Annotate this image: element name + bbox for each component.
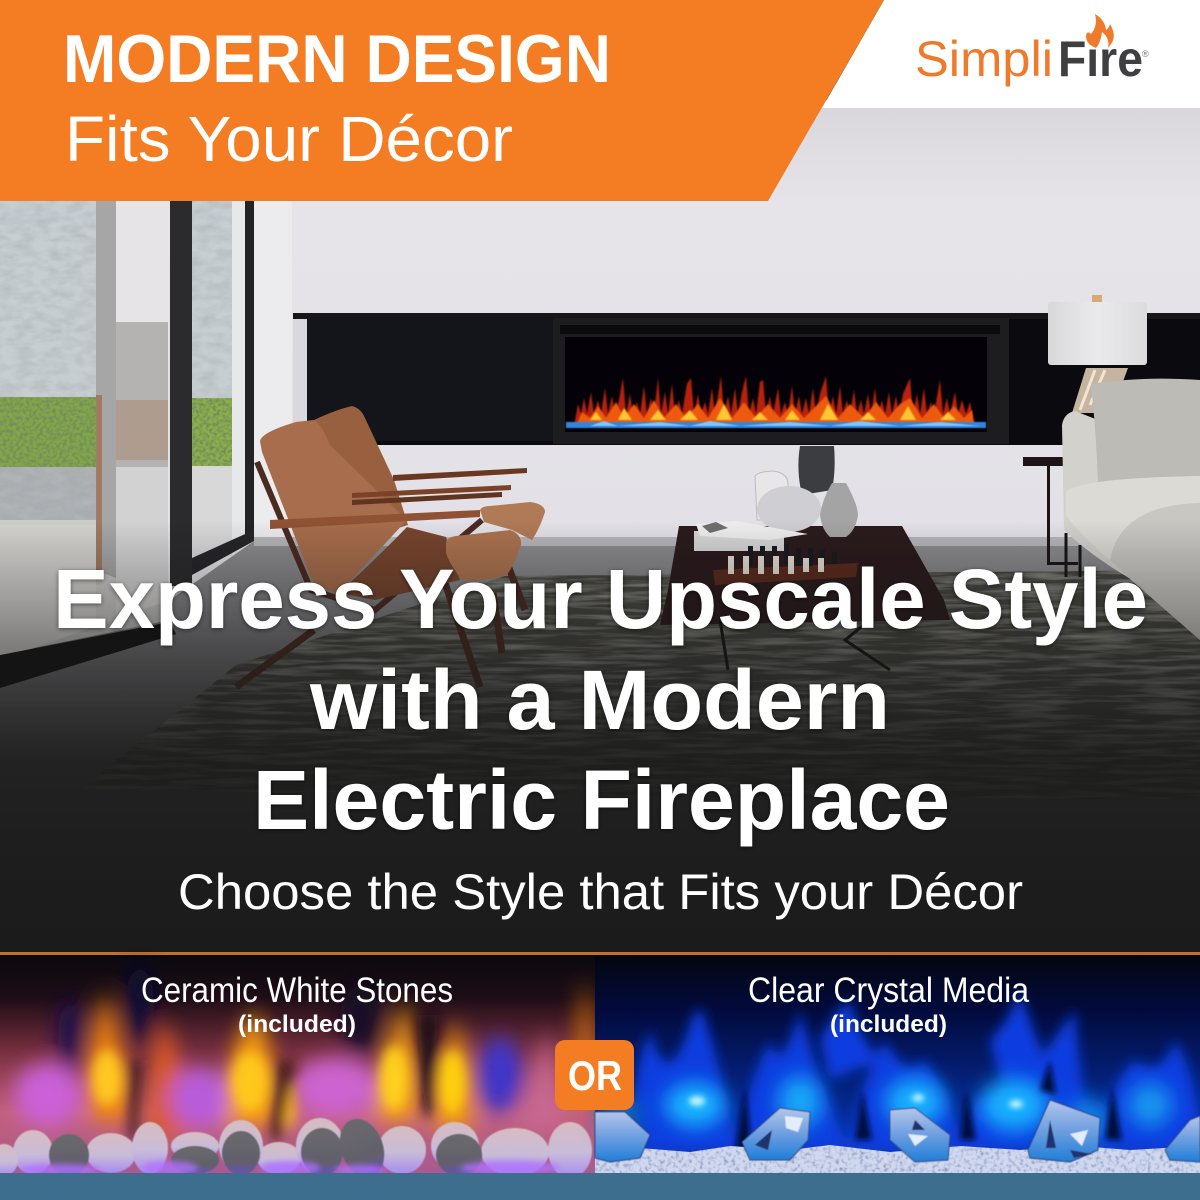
subheadline: Choose the Style that Fits your Décor (178, 864, 1023, 920)
side table (1023, 457, 1078, 565)
heading: modern design: MODERN DESIGN (63, 21, 611, 97)
rug (80, 570, 1200, 800)
registered mark: ® (1142, 49, 1149, 59)
label: ceramic white stones (141, 971, 453, 1038)
logo: SimpliFire (915, 14, 1149, 87)
panel: header banner (0, 0, 1200, 201)
wordmark: Simpli (915, 31, 1053, 87)
room photo (0, 100, 1200, 960)
crystals (595, 1100, 1200, 1162)
bottom blue strip (0, 1173, 1200, 1200)
badge: OR: OR (568, 1052, 622, 1099)
headline line 1: Express Your Upscale Style (53, 552, 1148, 646)
books (694, 521, 808, 551)
armchairs (236, 406, 545, 687)
orange banner shape (0, 0, 884, 201)
label: ceramic white stones: (included) (238, 1011, 356, 1038)
panel: clear crystal media (595, 955, 1200, 1173)
lamp (1048, 295, 1147, 413)
fireplace flames (566, 376, 986, 428)
icon: flame (1086, 14, 1114, 48)
label: clear crystal media: (included) (830, 1011, 947, 1038)
logo backing (822, 0, 1200, 108)
label: ceramic white stones: Ceramic White Stones (141, 971, 453, 1010)
flames: blue (600, 990, 1200, 1150)
headline line 3: Electric Fireplace (253, 753, 950, 847)
wordmark: Fire: Fire (1058, 31, 1143, 87)
headline (53, 552, 1148, 847)
divider line (0, 952, 1200, 955)
panel: ceramic white stones (0, 955, 596, 1183)
dark fade overlay (0, 520, 1200, 960)
headline line 2: with a Modern (309, 653, 890, 747)
vases (755, 446, 858, 537)
subheading: fits your decor: Fits Your Décor (65, 103, 513, 175)
chess set (713, 544, 858, 585)
badge: OR (555, 1040, 634, 1110)
coffee table (660, 526, 950, 625)
flames: orange and purple (14, 965, 596, 1140)
label: clear crystal media (748, 971, 1029, 1038)
sofa (1062, 379, 1200, 640)
recessed wall panel (293, 313, 1200, 445)
stones (0, 1113, 592, 1183)
label: clear crystal media: Clear Crystal Media (748, 971, 1029, 1010)
crystal gravel (595, 1145, 1200, 1173)
fireplace (553, 318, 1009, 444)
window wall (0, 201, 292, 651)
floor (0, 537, 1200, 960)
